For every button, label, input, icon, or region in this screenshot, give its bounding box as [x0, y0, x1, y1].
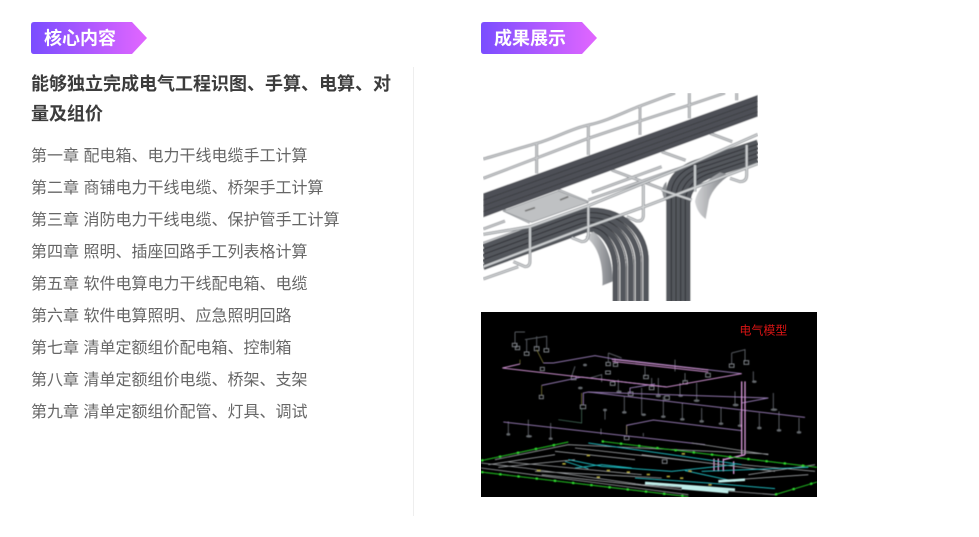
subheading text: 能够独立完成电气工程识图、手算、电算、对量及组价 — [31, 74, 391, 124]
panel: results showcase — [481, 22, 817, 497]
heading tag: core content: 核心内容 — [44, 28, 116, 48]
image: wire mesh cable tray — [483, 93, 758, 301]
image: electrical 3D model — [481, 312, 817, 497]
hanging lamps — [508, 332, 799, 439]
chapter 2: 第二章 商铺电力干线电缆、桥架手工计算 — [31, 180, 323, 197]
label: electrical model: 电气模型 — [739, 323, 787, 338]
chapter 9: 第九章 清单定额组价配管、灯具、调试 — [31, 404, 307, 421]
chapter 5: 第五章 软件电算电力干线配电箱、电缆 — [31, 276, 307, 293]
heading tag: results showcase: 成果展示 — [494, 28, 566, 48]
chapter 4: 第四章 照明、插座回路手工列表格计算 — [31, 244, 307, 261]
chapter 3: 第三章 消防电力干线电缆、保护管手工计算 — [31, 212, 339, 229]
conduit lines — [503, 356, 805, 445]
chapter list — [31, 147, 339, 421]
chapter 8: 第八章 清单定额组价电缆、桥架、支架 — [31, 372, 307, 389]
chapter 7: 第七章 清单定额组价配电箱、控制箱 — [31, 340, 291, 357]
floor plan — [481, 443, 815, 495]
heading tag: core content — [31, 22, 147, 54]
panel: core content — [31, 22, 391, 421]
heading tag: results showcase — [481, 22, 597, 54]
chapter 1: 第一章 配电箱、电力干线电缆手工计算 — [31, 148, 307, 165]
chapter 6: 第六章 软件电算照明、应急照明回路 — [31, 308, 291, 325]
